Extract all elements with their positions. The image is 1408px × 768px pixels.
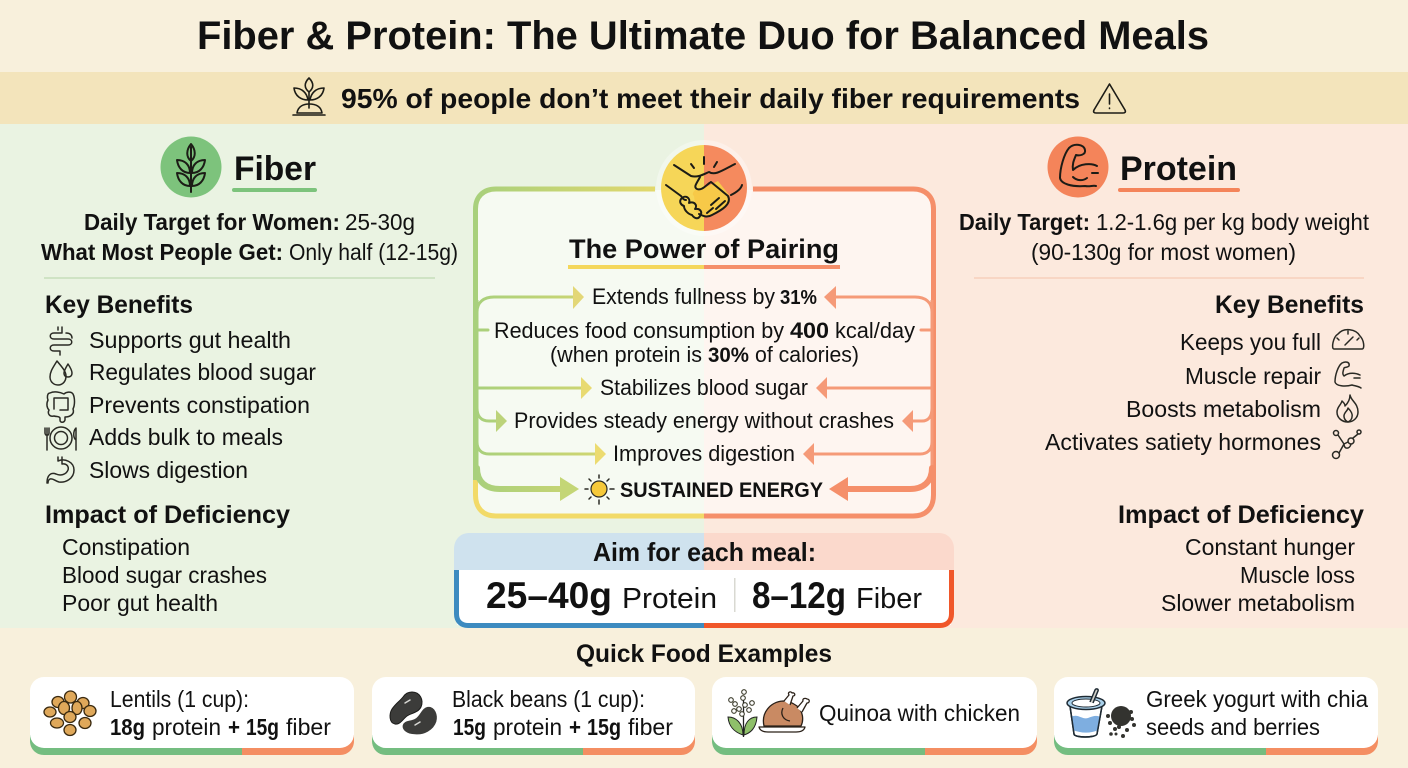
lentils text: Lentils (1 cup):: [110, 686, 249, 712]
icon: gut: [50, 327, 72, 355]
icon: wheat badge: [160, 136, 222, 198]
card: black beans: [372, 677, 695, 755]
black beans text: +: [569, 714, 581, 740]
lentils text: +: [228, 714, 240, 740]
lentils text: [110, 686, 331, 740]
fiber daily target: What Most People Get:: [41, 239, 283, 265]
icon: black beans: [390, 692, 438, 735]
black beans text: Black beans (1 cup):: [452, 686, 645, 712]
row: reduces food consumption: 30%: [708, 344, 749, 367]
protein key benefits: Activates satiety hormones: [1045, 429, 1321, 455]
panel: protein: [704, 124, 1408, 628]
greek yogurt text: seeds and berries: [1146, 714, 1320, 740]
protein key benefits: Key Benefits: [1215, 291, 1364, 319]
protein daily target: (90-130g for most women): [1031, 239, 1296, 265]
icon: stomach: [47, 457, 74, 483]
row: sustained energy: [477, 468, 932, 504]
icon: chia seeds: [1106, 706, 1136, 738]
card: lentils: [30, 677, 354, 755]
protein target: Protein: [622, 583, 717, 615]
aim heading: Aim for each meal:: [593, 537, 816, 567]
protein target: [486, 575, 717, 616]
fiber daily target: [41, 209, 458, 265]
icon: handshake badge: [656, 140, 752, 236]
fiber daily target: 25-30g: [345, 209, 415, 235]
fiber daily target: Only half (12-15g): [289, 239, 458, 265]
icon: gauge: [1333, 330, 1364, 349]
panel: power of pairing: [475, 140, 934, 516]
protein key benefits: Boosts metabolism: [1126, 396, 1321, 422]
row: stabilizes blood sugar: Stabilizes blood sugar: [600, 375, 808, 400]
icon: lentils: [44, 691, 96, 736]
lentils text: 18g: [110, 714, 145, 740]
protein key benefits: Muscle repair: [1185, 363, 1321, 389]
icon: molecule: [1332, 430, 1361, 458]
row: improves digestion: Improves digestion: [613, 441, 795, 466]
fiber key benefits: Regulates blood sugar: [89, 359, 316, 385]
fiber key benefits: Slows digestion: [89, 457, 248, 483]
fiber impact of deficiency: Poor gut health: [62, 590, 218, 616]
row: sustained energy: SUSTAINED ENERGY: [620, 479, 823, 502]
row: stabilizes blood sugar: [477, 375, 932, 400]
icon: sun: [585, 475, 614, 504]
lentils text: fiber: [286, 714, 331, 740]
row: improves digestion: [477, 441, 932, 466]
trunk connectors: [477, 300, 932, 470]
icon: yogurt cup: [1067, 689, 1105, 737]
heading: quick food examples: Quick Food Examples: [576, 640, 832, 668]
protein daily target: [959, 209, 1370, 265]
row: reduces food consumption: kcal/day: [835, 318, 915, 343]
black beans text: [452, 686, 673, 740]
row: extends fullness: Extends fullness by: [592, 284, 775, 309]
icon: warning triangle: [1094, 84, 1125, 113]
black beans text: protein: [493, 714, 562, 740]
fiber key benefits: Key Benefits: [45, 291, 193, 319]
icon: quinoa plant: [728, 690, 757, 737]
fiber target: Fiber: [856, 583, 922, 615]
protein daily target: Daily Target:: [959, 209, 1090, 235]
fiber daily target: Daily Target for Women:: [84, 209, 340, 235]
row: reduces food consumption: of calories): [755, 342, 859, 367]
fiber key benefits: [45, 291, 316, 483]
row: extends fullness: 31%: [780, 287, 817, 309]
black beans text: 15g: [453, 714, 486, 740]
panel: aim for each meal: [454, 533, 954, 626]
protein impact of deficiency: Constant hunger: [1185, 534, 1355, 560]
fiber impact of deficiency: Blood sugar crashes: [62, 562, 267, 588]
stat banner: [0, 72, 1408, 124]
greek yogurt text: [1146, 686, 1368, 740]
fiber impact of deficiency: Impact of Deficiency: [45, 501, 290, 529]
protein impact of deficiency: Impact of Deficiency: [1118, 501, 1364, 529]
banner text: 95% of people don’t meet their daily fiber requirements: [341, 83, 1080, 114]
row: reduces food consumption: 400: [790, 318, 829, 343]
row: reduces food consumption: [477, 318, 932, 367]
icon: muscle badge: [1048, 136, 1108, 198]
row: reduces food consumption: Reduces food consumption by: [494, 318, 784, 343]
icon: intestine: [47, 392, 74, 422]
lentils text: 15g: [246, 714, 279, 740]
fiber key benefits: Adds bulk to meals: [89, 424, 283, 450]
icon: small muscle: [1335, 362, 1361, 388]
panel: fiber: [0, 124, 704, 628]
protein daily target: 1.2-1.6g per kg body weight: [1096, 209, 1370, 235]
heading: protein: Protein: [1120, 150, 1237, 188]
fiber impact of deficiency: Constipation: [62, 534, 190, 560]
icon: sprout: [293, 78, 325, 115]
title: Fiber & Protein: The Ultimate Duo for Balanced Meals: [197, 14, 1209, 58]
protein impact of deficiency: Slower metabolism: [1161, 590, 1355, 616]
fiber key benefits: Prevents constipation: [89, 392, 310, 418]
protein target: 25–40g: [486, 575, 612, 616]
icon: flame: [1337, 395, 1358, 422]
fiber impact of deficiency: [45, 501, 290, 616]
icon: drops: [50, 361, 72, 385]
heading: fiber: Fiber: [234, 150, 316, 188]
fiber key benefits: Supports gut health: [89, 327, 291, 353]
greek yogurt text: Greek yogurt with chia: [1146, 686, 1368, 712]
icon: plate and cutlery: [45, 427, 76, 450]
row: steady energy: Provides steady energy without crashes: [514, 408, 894, 433]
protein key benefits: [1045, 291, 1364, 458]
row: reduces food consumption: (when protein is: [550, 342, 702, 367]
lentils text: protein: [152, 714, 221, 740]
heading: the power of pairing: The Power of Pairing: [569, 234, 839, 264]
fiber target: [752, 575, 922, 616]
black beans text: fiber: [628, 714, 673, 740]
icon: roast chicken: [759, 692, 809, 732]
black beans text: 15g: [587, 714, 621, 740]
card: quinoa with chicken: [712, 677, 1037, 755]
card: greek yogurt: [1054, 677, 1378, 755]
protein key benefits: Keeps you full: [1180, 329, 1321, 355]
quinoa text: Quinoa with chicken: [819, 700, 1020, 726]
fiber target: 8–12g: [752, 575, 846, 616]
row: extends fullness: [477, 284, 932, 312]
protein impact of deficiency: [1118, 501, 1364, 616]
protein impact of deficiency: Muscle loss: [1240, 562, 1355, 588]
